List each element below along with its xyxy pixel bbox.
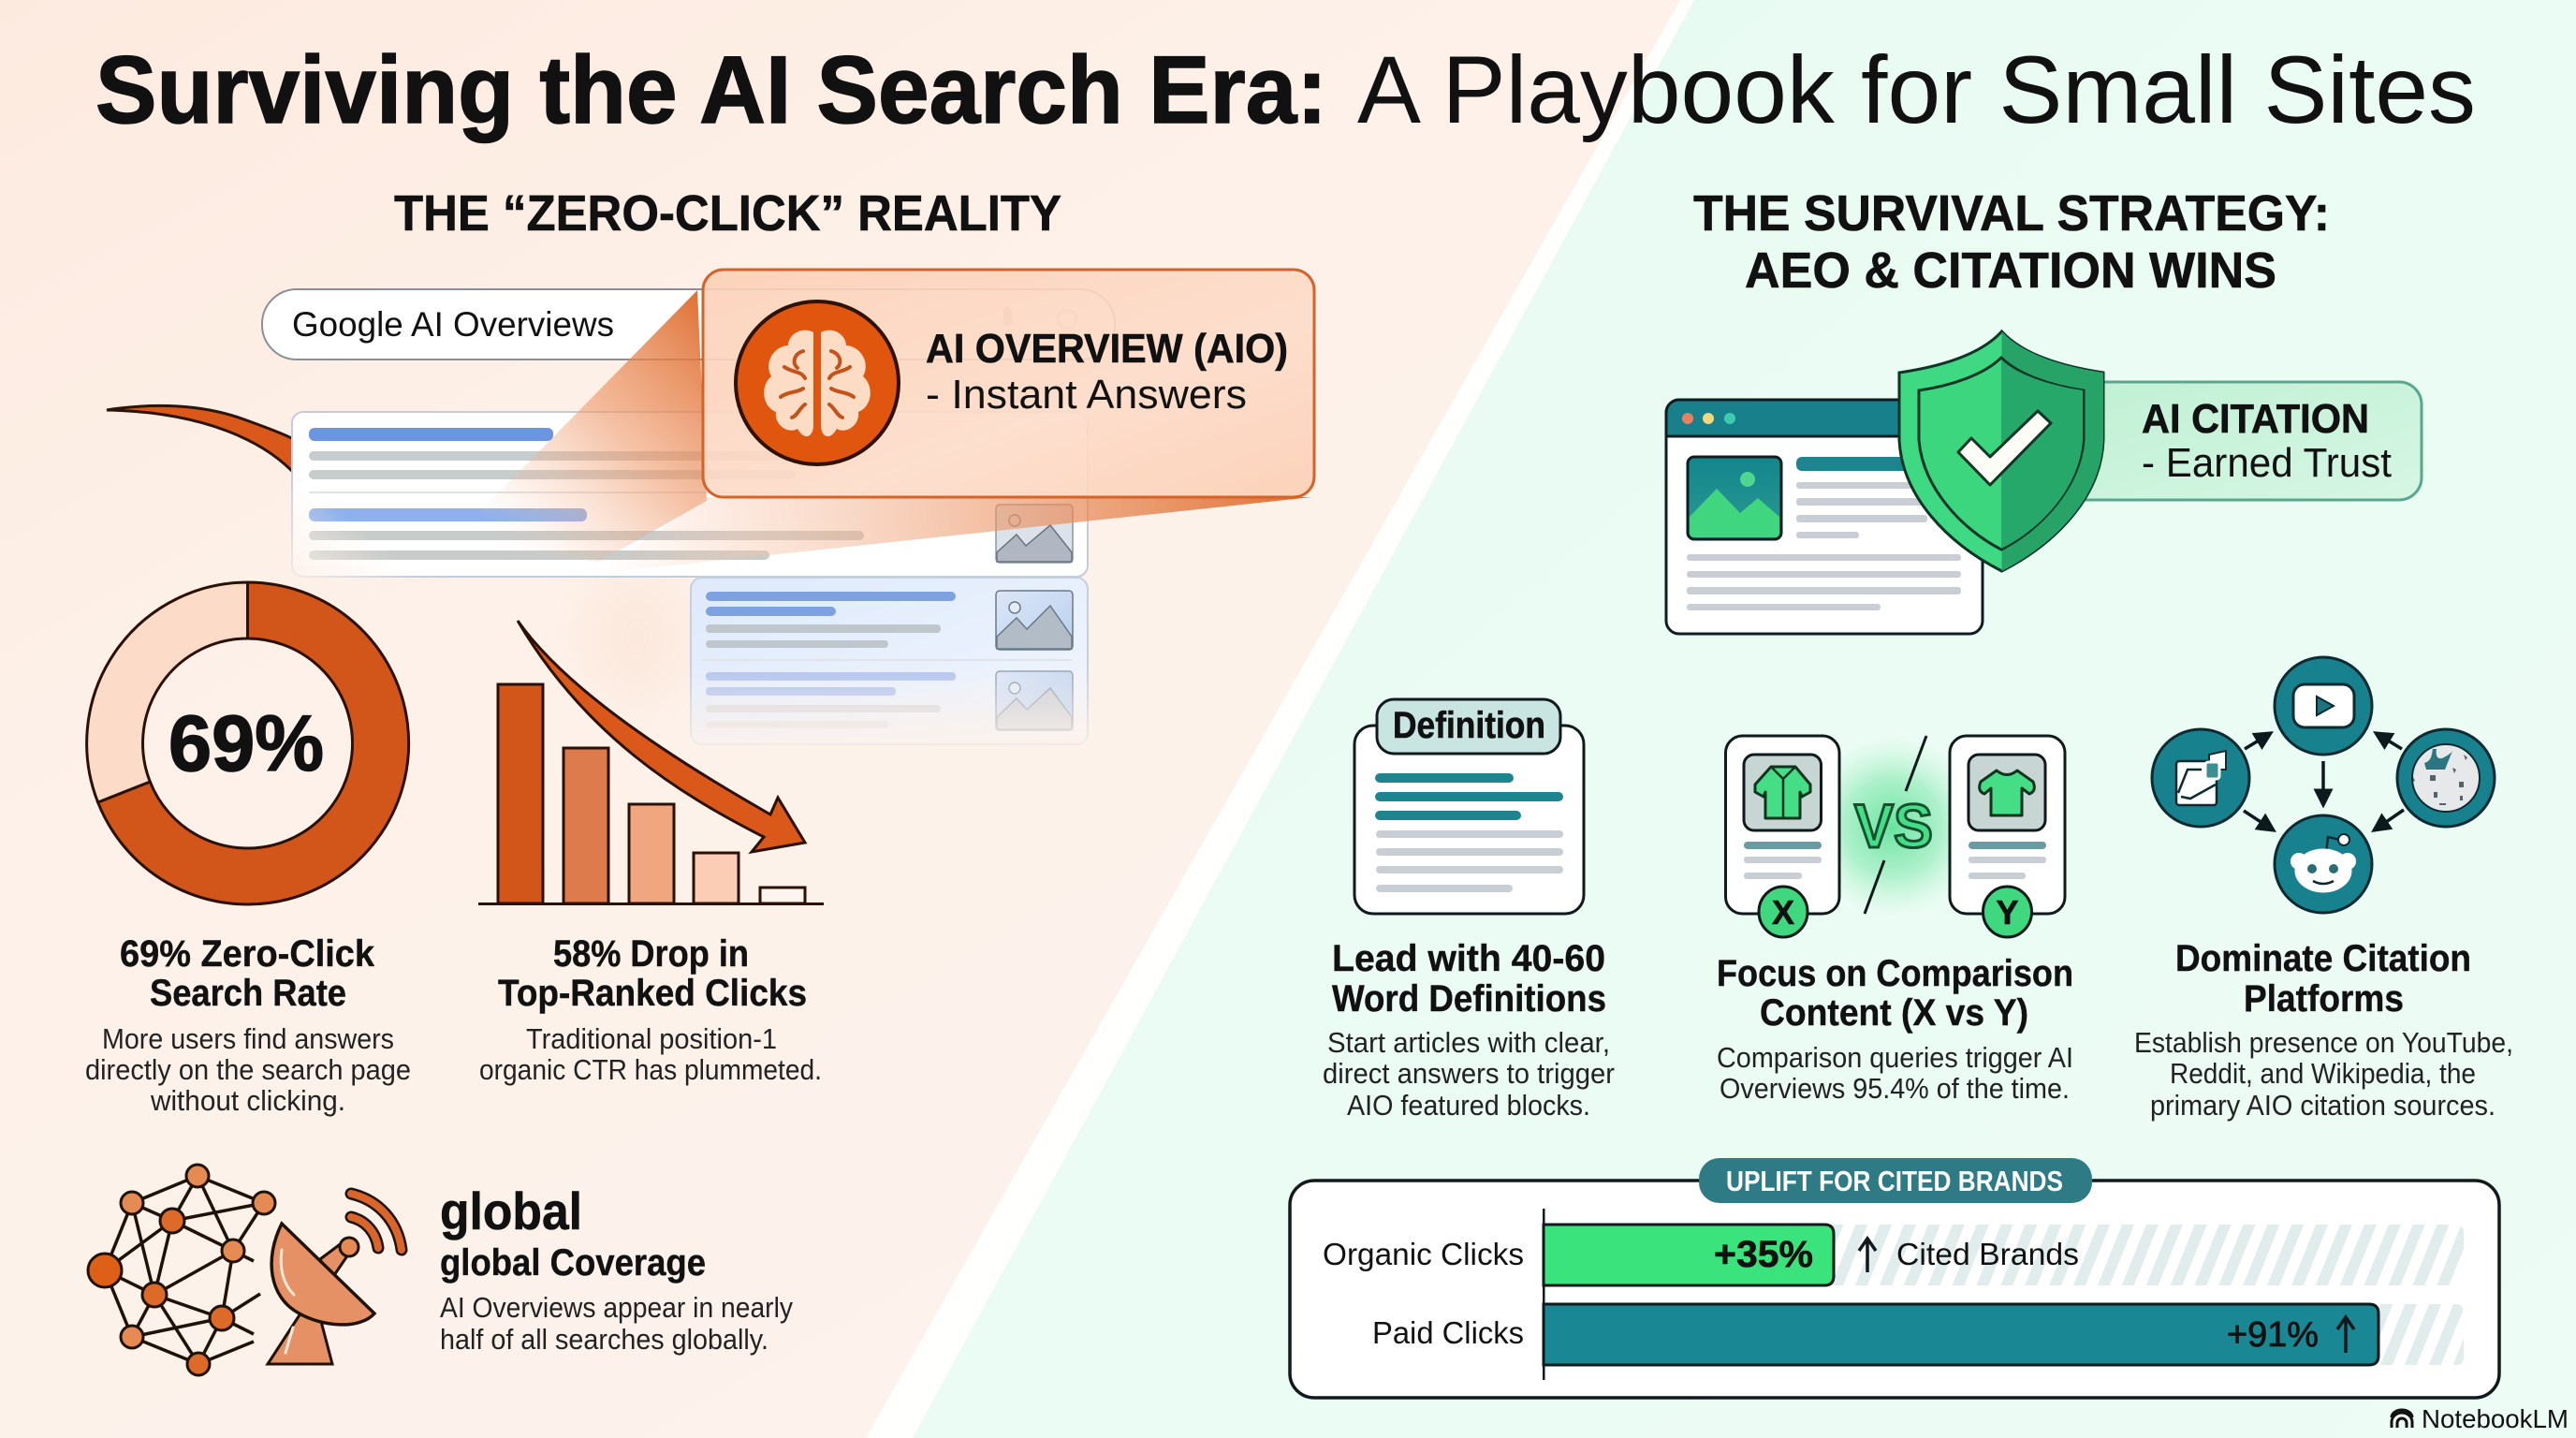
icon: wikipedia globe bbox=[2397, 729, 2495, 827]
icon: shield with check bbox=[1899, 331, 2103, 571]
stat: zero-click search rate: without clicking. bbox=[150, 1084, 345, 1117]
icon: social sharing bbox=[2152, 729, 2249, 827]
strategy: comparison content: Focus on Comparison bbox=[1717, 953, 2073, 994]
swoosh arrow into results bbox=[107, 405, 300, 479]
icon: brain bbox=[736, 301, 899, 464]
icon: citation platforms network bbox=[2152, 657, 2495, 913]
AI citation label bbox=[2041, 382, 2422, 500]
product card Y: Y bbox=[1996, 893, 2018, 932]
heading: the survival strategy: THE SURVIVAL STRATEGY: bbox=[1693, 185, 2330, 242]
product card X bbox=[1726, 736, 1839, 937]
stat: global coverage: global Coverage bbox=[440, 1242, 706, 1284]
heading: the survival strategy bbox=[1693, 185, 2330, 299]
heading: the zero-click reality: THE “ZERO-CLICK” REALITY bbox=[394, 185, 1061, 242]
AI citation label: - Earned Trust bbox=[2142, 440, 2392, 486]
bar: organic clicks: +35% bbox=[1714, 1234, 1813, 1275]
title: A Playbook for Small Sites bbox=[1357, 37, 2476, 143]
icon: definition document: Definition bbox=[1393, 705, 1545, 746]
bar: paid clicks: +91% bbox=[2227, 1315, 2319, 1355]
callout text: AI OVERVIEW (AIO) bbox=[926, 326, 1288, 372]
logo: NotebookLM: NotebookLM bbox=[2422, 1404, 2569, 1433]
product card Y bbox=[1950, 736, 2065, 937]
stat: drop in top-ranked clicks bbox=[479, 933, 822, 1086]
magnifying beam bbox=[449, 290, 1312, 573]
stat: global coverage: global bbox=[440, 1181, 582, 1240]
icon: definition document bbox=[1354, 699, 1584, 914]
strategy: comparison content bbox=[1717, 953, 2073, 1105]
bar chart: declining clicks bbox=[478, 621, 824, 905]
strategy: definitions: Lead with 40-60 bbox=[1332, 938, 1605, 979]
donut chart: 69% bbox=[87, 582, 409, 904]
search bar: Google AI Overviews bbox=[292, 305, 614, 344]
stat: drop in top-ranked clicks: organic CTR has plummeted. bbox=[479, 1053, 822, 1086]
icon: global network bbox=[88, 1165, 275, 1375]
strategy: citation platforms: Establish presence on YouTube, bbox=[2134, 1026, 2513, 1059]
strategy: comparison content: Content (X vs Y) bbox=[1760, 992, 2028, 1034]
strategy: definitions: AIO featured blocks. bbox=[1347, 1089, 1590, 1122]
strategy: comparison content: Comparison queries trigger AI bbox=[1717, 1041, 2073, 1074]
title: Surviving the AI Search Era: bbox=[95, 37, 1327, 143]
AI citation label: AI CITATION bbox=[2142, 396, 2369, 442]
strategy: citation platforms bbox=[2134, 938, 2513, 1122]
icon: comparison X vs Y bbox=[1726, 736, 2065, 937]
bar: organic clicks bbox=[1323, 1225, 2464, 1285]
strategy: definitions: Start articles with clear, bbox=[1327, 1026, 1610, 1059]
strategy: definitions bbox=[1323, 938, 1615, 1122]
strategy: citation platforms: Reddit, and Wikipedia, the bbox=[2170, 1057, 2476, 1090]
arrows between platforms bbox=[2244, 733, 2404, 830]
stat: zero-click search rate: directly on the search page bbox=[85, 1053, 411, 1086]
strategy: citation platforms: Dominate Citation bbox=[2175, 938, 2471, 979]
browser window bbox=[1666, 400, 1983, 634]
stat: drop in top-ranked clicks: Top-Ranked Clicks bbox=[498, 973, 807, 1014]
strategy: citation platforms: Platforms bbox=[2244, 978, 2404, 1020]
strategy: comparison content: Overviews 95.4% of the time. bbox=[1720, 1072, 2070, 1105]
icon: reddit alien bbox=[2275, 815, 2372, 913]
search bar bbox=[262, 289, 1115, 360]
stat: drop in top-ranked clicks: 58% Drop in bbox=[553, 933, 749, 975]
stat: drop in top-ranked clicks: Traditional position-1 bbox=[526, 1022, 777, 1055]
stat: zero-click search rate bbox=[85, 933, 411, 1117]
title bbox=[95, 37, 2476, 143]
strategy: definitions: direct answers to trigger bbox=[1323, 1057, 1615, 1090]
search results lower card bbox=[691, 578, 1088, 744]
stat: global coverage: half of all searches globally. bbox=[440, 1323, 768, 1356]
icon: satellite dish bbox=[268, 1194, 402, 1364]
callout text: - Instant Answers bbox=[926, 372, 1247, 418]
panel: uplift for cited brands bbox=[1290, 1158, 2499, 1398]
stat: zero-click search rate: Search Rate bbox=[150, 973, 346, 1014]
icon: comparison X vs Y: VS bbox=[1854, 791, 1933, 860]
stat: zero-click search rate: 69% Zero-Click bbox=[120, 933, 375, 975]
search result card bbox=[292, 412, 1088, 577]
donut chart: 69%: 69% bbox=[168, 699, 324, 787]
callout text bbox=[926, 326, 1288, 418]
stat: zero-click search rate: More users find answers bbox=[102, 1022, 394, 1055]
panel: AI overview callout bbox=[703, 270, 1314, 497]
stat: global coverage bbox=[440, 1181, 793, 1356]
pill heading bbox=[1699, 1158, 2092, 1203]
strategy: citation platforms: primary AIO citation sources. bbox=[2150, 1089, 2496, 1122]
pill heading: UPLIFT FOR CITED BRANDS bbox=[1726, 1165, 2063, 1197]
bar: paid clicks bbox=[1372, 1304, 2464, 1365]
bar: organic clicks: Organic Clicks bbox=[1323, 1237, 1524, 1271]
icon: video platform bbox=[2275, 657, 2372, 755]
stat: global coverage: AI Overviews appear in nearly bbox=[440, 1291, 793, 1324]
heading: the survival strategy: AEO & CITATION WINS bbox=[1745, 242, 2276, 299]
bar: organic clicks: Cited Brands bbox=[1896, 1237, 2079, 1271]
product card X: X bbox=[1772, 893, 1794, 932]
bar: paid clicks: Paid Clicks bbox=[1372, 1315, 1524, 1350]
strategy: definitions: Word Definitions bbox=[1332, 978, 1606, 1020]
arrow: downward trend bbox=[518, 621, 805, 852]
